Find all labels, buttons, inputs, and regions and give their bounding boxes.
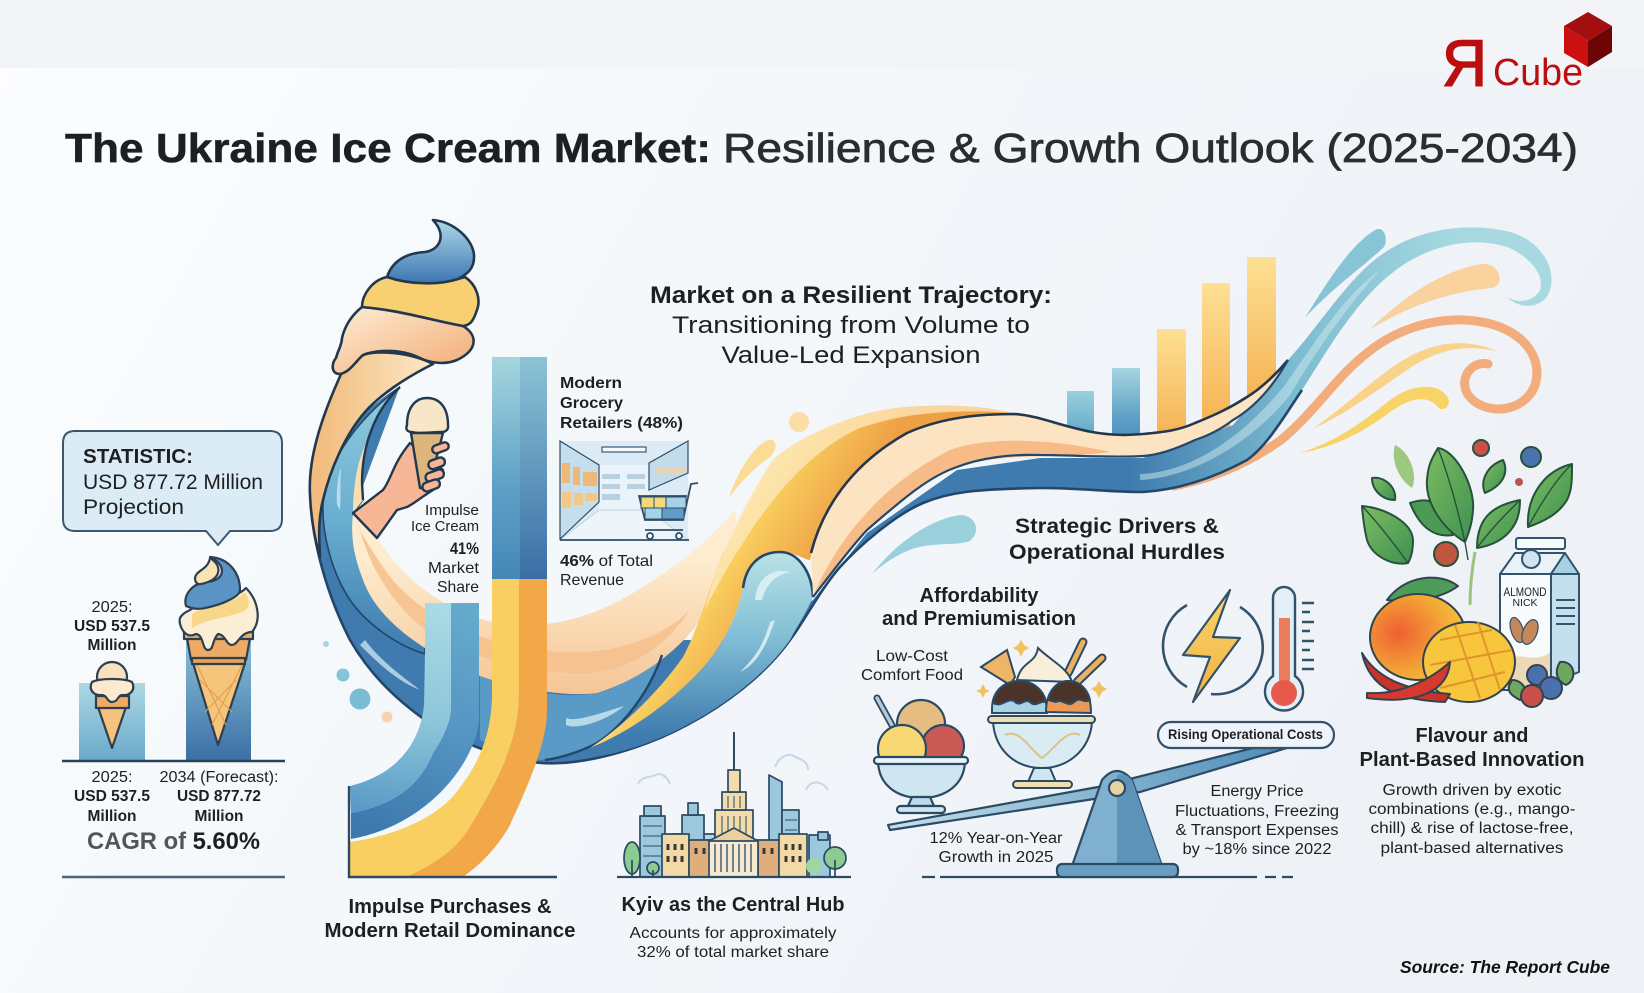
label: impulse ice cream: 41%	[450, 539, 479, 558]
label: low-cost comfort food: Comfort Food	[861, 667, 963, 684]
title	[65, 125, 1578, 171]
label: rising operational costs pill: Rising Operational Costs	[1168, 727, 1323, 742]
icon: leaves and berries	[1362, 440, 1572, 605]
scale: stand	[1072, 771, 1162, 866]
wave: bubbles	[323, 641, 392, 722]
icon: almond milk carton: NICK	[1512, 597, 1538, 609]
panel: statistic callout: Projection	[83, 496, 184, 519]
label: flavour and plant-based innovation	[1360, 725, 1584, 857]
icon: almond milk carton: ALMOND	[1504, 587, 1546, 599]
label: impulse purchases heading: Modern Retail Dominance	[324, 920, 576, 942]
panel: statistic callout: USD 877.72 Million	[83, 471, 263, 494]
label: low-cost comfort food	[861, 648, 963, 684]
wave: water crest	[590, 552, 813, 756]
store: cart	[639, 483, 698, 539]
swirl: yellow layer	[362, 277, 478, 326]
label: flavour and plant-based innovation: Plant-Based Innovation	[1360, 749, 1584, 771]
wave: peach stripe	[360, 530, 690, 673]
skyline: trees	[624, 842, 846, 877]
label: bar values: USD 877.72	[177, 788, 261, 805]
label: flavour and plant-based innovation: chill) & rise of lactose-free,	[1370, 820, 1574, 837]
label: energy costs: by ~18% since 2022	[1182, 841, 1332, 858]
wave: yellow drop	[729, 440, 776, 498]
label: flavour and plant-based innovation: combinations (e.g., mango-	[1368, 801, 1576, 818]
panel: market trajectory heading	[650, 282, 1052, 369]
wave: pale yellow crest	[705, 406, 1012, 610]
icon: Kyiv skyline	[617, 732, 851, 877]
source note: Source: The Report Cube	[1400, 957, 1610, 977]
label: energy costs: Energy Price	[1210, 783, 1304, 800]
label: revenue share: Revenue	[560, 572, 624, 589]
panel: statistic callout: STATISTIC:	[83, 446, 193, 468]
scale: beam	[888, 748, 1287, 830]
label: revenue share: 46% of Total	[560, 553, 653, 570]
hand: scoop	[406, 398, 448, 433]
wave: light left band	[323, 387, 425, 654]
wave: cream top outline	[811, 360, 1288, 553]
decorative swirls right	[1174, 229, 1537, 486]
label: low-cost comfort food: Low-Cost	[876, 648, 949, 665]
heading: affordability: and Premiumisation	[882, 608, 1076, 630]
hand: cone	[411, 433, 443, 490]
wave: blue gloss	[1140, 270, 1380, 480]
swirl: blue tip	[387, 220, 474, 283]
wave: dark divider	[545, 655, 662, 760]
wave: blue boundary	[813, 360, 1288, 597]
icon: hand holding ice cream	[353, 387, 450, 538]
heading: affordability: Affordability	[920, 585, 1039, 607]
store: left shelves	[560, 441, 599, 539]
panel: market trajectory heading: Value-Led Expansion	[722, 342, 980, 369]
mango: chili peppers	[1362, 653, 1450, 702]
label: energy costs: Fluctuations, Freezing	[1175, 803, 1339, 820]
panel: central ice cream wave	[311, 227, 1552, 763]
wave: light streak	[337, 468, 420, 690]
scale: ground line	[922, 876, 1293, 878]
panel: market trajectory heading: Market on a Resilient Trajectory:	[650, 282, 1052, 309]
label: modern grocery retailers	[560, 375, 683, 432]
skyline: far towers	[640, 775, 830, 877]
icon: supermarket aisle with cart	[560, 441, 698, 540]
label: impulse ice cream: Share	[437, 579, 479, 596]
wave: crest highlight	[740, 571, 790, 672]
wave: yellow orange band	[590, 406, 1012, 748]
label: flavour and plant-based innovation: Flavour and	[1416, 725, 1528, 747]
label: bar values: 2025:	[92, 769, 132, 786]
leaves: back leaves	[1362, 445, 1572, 564]
label: Kyiv central hub	[622, 894, 844, 961]
skyline: clouds	[638, 755, 828, 790]
chart: L-shaped market share bars	[349, 357, 557, 877]
icon: small ice cream cone	[91, 662, 133, 748]
label: impulse ice cream: Ice Cream	[411, 519, 479, 535]
label: impulse purchases heading	[324, 896, 576, 942]
label: flavour and plant-based innovation: Growth driven by exotic	[1382, 782, 1562, 799]
label: impulse ice cream: Market	[428, 560, 480, 577]
store: right shelves	[649, 441, 688, 490]
store: back wall	[599, 447, 649, 510]
icon: almond milk carton	[1500, 538, 1579, 690]
label: rising operational costs pill	[1158, 722, 1334, 748]
mango: whole fruit	[1370, 594, 1466, 680]
heading: strategic drivers: Operational Hurdles	[1009, 540, 1225, 564]
icon: balance scale	[888, 748, 1293, 877]
wave: cream sliver beside arm	[353, 436, 370, 513]
wave: highlight	[566, 706, 624, 726]
title: The Ukraine Ice Cream Market:	[65, 125, 711, 171]
logo: RCube: Cube	[1493, 52, 1583, 94]
short bar: impulse	[350, 603, 479, 839]
store: floor	[560, 510, 688, 540]
label: Kyiv central hub: 32% of total market share	[637, 944, 829, 961]
label: modern grocery retailers: Modern	[560, 375, 622, 392]
label: revenue share	[560, 553, 653, 589]
label: 2025 above bar: Million	[88, 637, 136, 654]
label: bar values	[74, 769, 278, 825]
wave: crest outline	[743, 552, 813, 597]
chart: 2025 vs 2034 bars	[62, 637, 285, 761]
icon: sparkles	[976, 640, 1107, 698]
label: modern grocery retailers: Grocery	[560, 395, 623, 412]
label: impulse ice cream	[411, 503, 480, 596]
tall bar: yellow section	[350, 579, 547, 876]
icon: large ice cream cone	[180, 557, 258, 745]
hand: inner line	[362, 387, 400, 500]
wave: cream lower band	[352, 510, 745, 694]
leaves: stem	[1470, 552, 1475, 605]
axis	[349, 786, 557, 877]
label: Kyiv central hub: Kyiv as the Central Hub	[622, 894, 844, 916]
label: modern grocery retailers: Retailers (48%)	[560, 415, 683, 432]
icon: thermometer	[1265, 587, 1314, 710]
icon: mango, chili and blueberries	[1362, 578, 1573, 707]
label: energy costs	[1175, 783, 1339, 858]
wave: peach underside	[813, 441, 1110, 597]
skyline: tower lines	[643, 820, 797, 856]
chart: rising growth bars	[1067, 257, 1276, 454]
label: bar values: 2034 (Forecast):	[160, 769, 278, 786]
swirl: peach layer	[333, 307, 474, 374]
label: bar values: USD 537.5	[74, 788, 150, 805]
wave: blue drop	[872, 515, 976, 574]
logo: RCube: Я	[1442, 26, 1487, 100]
wave: cream right band	[811, 360, 1288, 597]
heading: affordability	[882, 585, 1076, 630]
label: growth	[930, 830, 1062, 866]
leaves: veins	[1362, 448, 1572, 563]
skyline: central tower	[715, 732, 753, 850]
big soft-serve swirl	[310, 220, 478, 557]
label: growth: Growth in 2025	[938, 849, 1054, 866]
hand: arm	[353, 443, 443, 538]
wave: outer outline	[311, 390, 1302, 763]
icon: comfort food bowl	[874, 698, 968, 813]
mango: cut fruit	[1423, 622, 1515, 702]
mango: blueberries	[1509, 662, 1573, 707]
label: flavour and plant-based innovation: plant-based alternatives	[1380, 840, 1564, 857]
wave: yellow dot	[789, 412, 809, 432]
icon: energy bolt	[1163, 590, 1263, 702]
label: energy costs: & Transport Expenses	[1176, 822, 1339, 839]
wave: lower blue panel	[480, 655, 662, 760]
label: CAGR: CAGR of 5.60%	[87, 828, 260, 855]
label: growth: 12% Year-on-Year	[930, 830, 1062, 847]
hand: fingers	[421, 441, 450, 493]
label: impulse purchases heading: Impulse Purchases &	[348, 896, 552, 918]
skyline: front buildings	[662, 828, 807, 877]
title: Resilience & Growth Outlook (2025-2034)	[723, 125, 1578, 171]
panel: statistic callout	[63, 431, 282, 545]
label: 2025 above bar	[74, 599, 150, 654]
logo: RCube	[1442, 12, 1612, 100]
wave: blue ribbon	[311, 227, 1552, 763]
heading: strategic drivers: Strategic Drivers &	[1015, 514, 1219, 538]
label: impulse ice cream: Impulse	[425, 503, 479, 519]
panel: market trajectory heading: Transitioning from Volume to	[672, 312, 1030, 339]
label: 2025 above bar: USD 537.5	[74, 618, 150, 635]
mango: stem leaf	[1387, 578, 1458, 601]
label: 2025 above bar: 2025:	[92, 599, 132, 616]
label: bar values: Million	[194, 808, 244, 825]
heading: strategic drivers	[1009, 514, 1225, 564]
label: Kyiv central hub: Accounts for approximately	[630, 925, 836, 942]
label: bar values: Million	[88, 808, 136, 825]
swirl: cone tube	[310, 352, 433, 557]
icon: premium sundae	[981, 642, 1102, 788]
tall bar: blue section	[492, 357, 547, 579]
berries	[1434, 440, 1541, 566]
